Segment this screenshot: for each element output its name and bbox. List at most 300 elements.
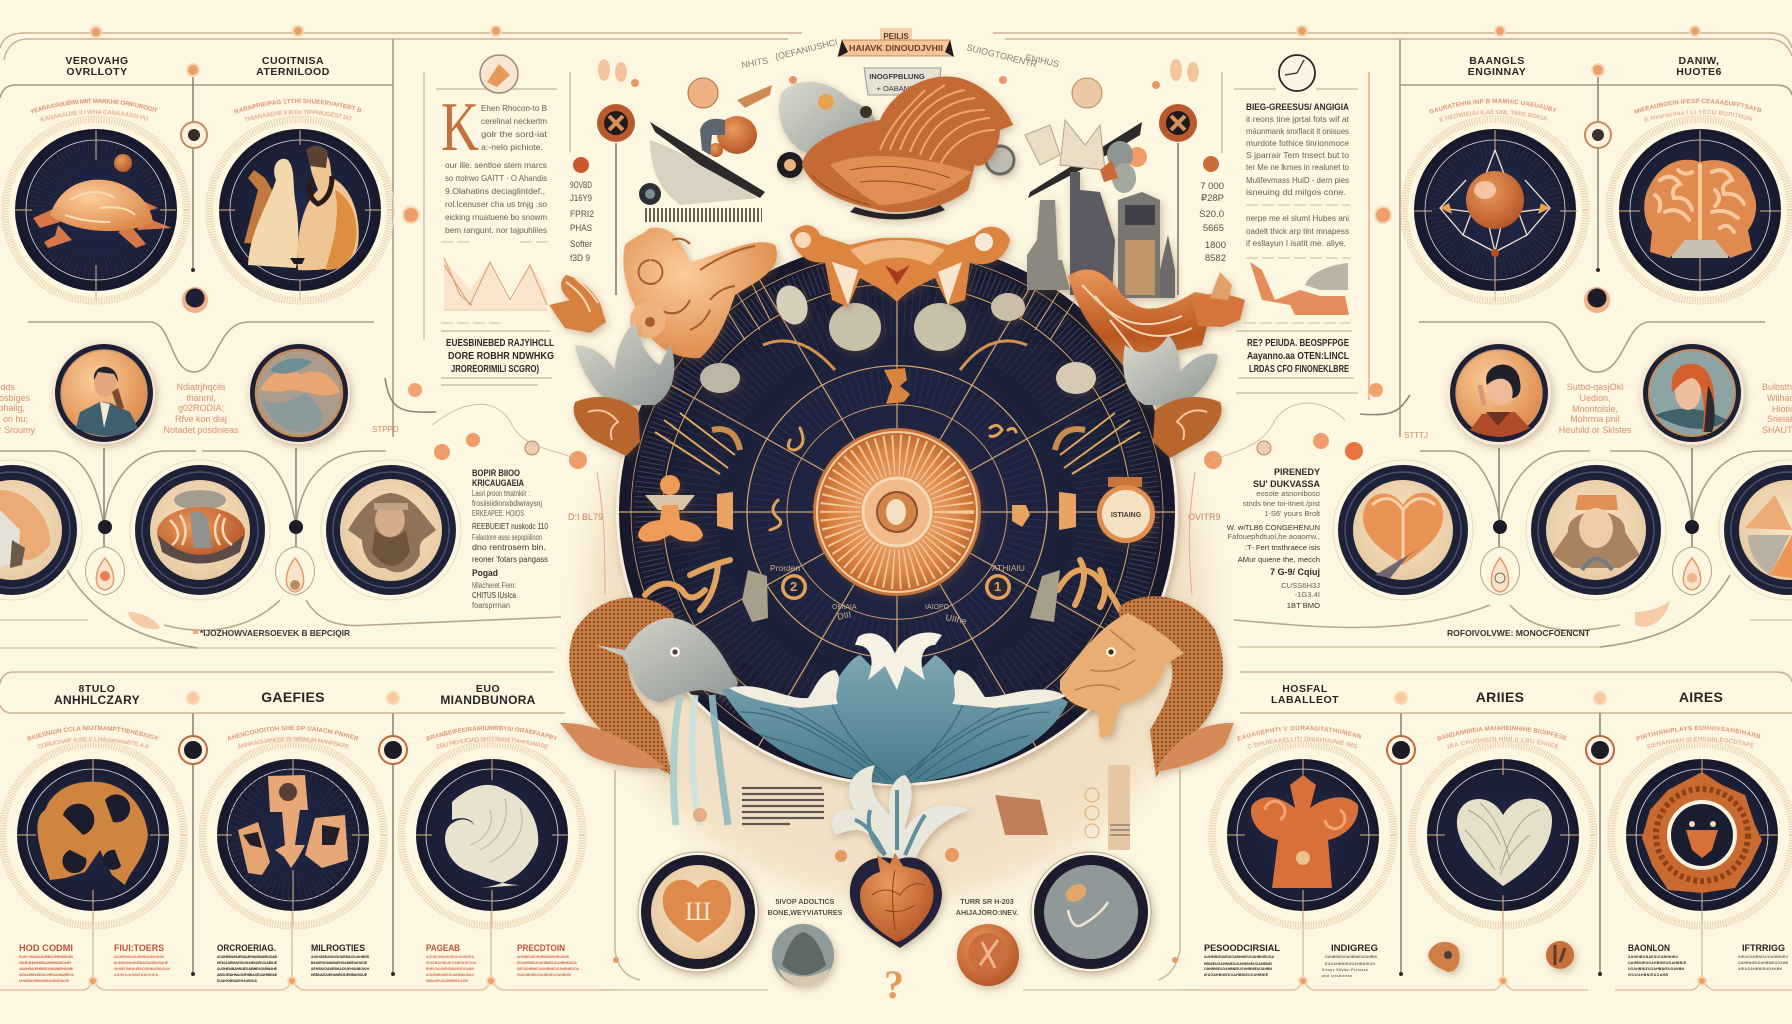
text block: murdote fothice tinrionmoce — [1246, 138, 1349, 148]
bottom labels right: IFTRRIGG — [1742, 943, 1785, 953]
glyph: question mark: ? — [884, 962, 904, 1007]
text block: our ille. sentloe stem marcs — [445, 160, 547, 170]
bottom labels right: NIEUOAHBNIEUOAHBNIEU — [1738, 955, 1789, 959]
mid-right info text: stnds tine toi-itneit./pist — [1243, 499, 1321, 508]
bottom labels right: BAONLON — [1628, 943, 1670, 953]
panel: medallion 9 white heart — [1409, 741, 1597, 929]
bottom labels left: HBIANEUOAHBNIEUAOH — [426, 979, 469, 983]
column titles: ARIIES — [1476, 689, 1524, 705]
orange side captions: Heuhild or Sklstes — [1559, 425, 1632, 435]
bottom labels left: AIUHEHAOAIUHEBIANHAUHIA — [114, 955, 165, 959]
bottom labels left: MILROGTIES — [311, 943, 365, 953]
scroll banner — [864, 68, 941, 95]
orange side captions: Mohrma pnil — [1570, 414, 1620, 424]
top centre: title ribbon: HAIAVK DINOUDJVHII — [849, 43, 943, 53]
diagonal blade — [1028, 122, 1142, 198]
summary heading: EUESBINEBED RAJYIHCLL — [446, 337, 554, 349]
panel: ring 3 bearded man — [321, 460, 461, 600]
panel: medallion 7 wing — [398, 741, 586, 929]
panel: medallion 6 hammer — [199, 741, 387, 929]
caption left: BONE,WEYVIATURES — [768, 908, 843, 917]
left goat — [560, 597, 738, 775]
panel: medallion 3 sphere — [1401, 116, 1589, 304]
icon: clock — [1279, 55, 1315, 91]
mid captions: ROFOIVOLVWE: MONOCFOENCNT — [1447, 628, 1591, 638]
caption right — [956, 897, 1018, 917]
tablets — [742, 570, 1060, 622]
arc captions: ANNAAGUANEEE BI WEIMUH MANHSKFE — [238, 736, 350, 749]
label text on wheel: UIIhe — [945, 612, 968, 626]
wheel symbols — [638, 280, 1155, 626]
column titles: DANIW, — [1679, 55, 1719, 67]
column titles: AIRES — [1679, 689, 1723, 705]
top centre: title ribbon: PEILIS — [883, 32, 909, 41]
stat list: 5665 — [1203, 223, 1224, 234]
bottom labels left — [19, 943, 580, 983]
icon: small seal — [1012, 505, 1030, 527]
papers — [1025, 120, 1105, 170]
label text on wheel: ATHIAIU — [992, 563, 1025, 573]
text block: S jparrair Tem tnsect but to — [1246, 150, 1349, 160]
text block: máunmank snxflacit it onisues — [1246, 126, 1349, 136]
icon: right pot: ISTIAING — [1111, 512, 1142, 519]
orange side captions — [0, 382, 1792, 435]
column titles: OVRLLOTY — [66, 66, 128, 78]
column titles: GAEFIES — [261, 689, 325, 705]
mid-left info text: Pogad — [472, 568, 498, 578]
caption right: TURR SR H-203 — [960, 897, 1014, 906]
bottom labels left: AOIHUBEANUIOHAEBAIOUAHNEB — [311, 955, 370, 959]
arc captions: YEARAASUUBIW MIIT MARKHE ORIKUNOGIT — [30, 98, 158, 114]
flourish decorations: D:I BL79 — [568, 512, 603, 522]
left hand ornament — [549, 275, 606, 333]
bottom labels right: INDIGREG — [1331, 943, 1378, 953]
orange side captions: Notadet posdnieas — [163, 425, 239, 435]
bottom labels right: OAHBNIEUOAHBNIEUOAHB — [1738, 961, 1789, 965]
line chart — [444, 258, 547, 310]
mid-left info text: Mlacheret Fem: — [472, 581, 516, 590]
lower gold scrolls — [645, 560, 1120, 610]
bottom labels left: BHEIOAUNEIOBAHUEIOABN — [426, 967, 475, 971]
arc captions: IRA CHUOHIUN HIHI II LBU EHIIEE E — [1447, 736, 1559, 749]
text block: cerelinal neckertm — [481, 116, 547, 126]
button: right grey — [1031, 852, 1151, 972]
small curved labels: SUIOGTORENTR — [966, 42, 1039, 70]
panel: ring 6 orange — [1719, 460, 1792, 600]
label text on wheel: DIII — [836, 609, 852, 622]
label text on wheel — [770, 563, 1025, 626]
upper gold arrows — [655, 413, 1140, 474]
mid-left info text: CHITUS IUsIca — [472, 591, 516, 600]
bottom labels left: AUOHEAIBAHNUEOAIBHEAOUBNAHE — [217, 967, 278, 971]
arc captions — [6, 59, 1792, 790]
grey plate — [650, 140, 758, 205]
orange side captions: Ndiatrjhqcils — [176, 382, 226, 392]
text block: eicking rnuatuene bo snowm — [445, 212, 547, 222]
bottom labels right: PESOODCIRSIAL — [1204, 943, 1281, 953]
bottom labels left: UHAEINOHBAHUIEAHNUEHAOB — [19, 979, 70, 983]
acanthus ornaments — [574, 397, 1222, 458]
summary heading: JROREORIMILI SCGRO) — [451, 363, 539, 375]
stat list: PHAS — [570, 223, 592, 234]
teardrop nodes — [85, 520, 1712, 595]
illustration: reclining figure — [1250, 262, 1349, 315]
panel: medallion 5 knot — [0, 741, 187, 929]
upper wheel ticks — [720, 280, 1075, 370]
bottom labels left: AHUIBEANOHUIEBAHNOIEUAHB — [517, 955, 570, 959]
stat list: 8582 — [1205, 253, 1226, 264]
mid-right info text: -1G3.4I — [1295, 590, 1320, 599]
column titles: HUOTE6 — [1676, 66, 1722, 78]
arc captions: BRANBEIFEEIRAIRIUMRBYS/ ORAEFAAPBY — [426, 726, 558, 741]
arc captions: AHENCOUOITOH SHE DP UAIACM PNHIER — [228, 726, 358, 741]
mid-left info text: ERKEAPEE. HOIOS — [472, 509, 524, 518]
numbered coins: 1 — [994, 579, 1001, 594]
caption left — [768, 897, 843, 917]
text block — [445, 103, 548, 235]
bottom labels left: AOUHEIBAHUIENAUEHIAOBAHEUOAB — [217, 955, 278, 959]
barcode — [645, 208, 762, 222]
bottom labels left: ORCROERIAG. — [217, 943, 276, 953]
diagonal blade — [650, 122, 765, 198]
top-right collage — [999, 59, 1199, 298]
bottom labels left: AOUEHBIANEOUAHBNIUEAO — [426, 973, 474, 977]
small icons bottom right — [1428, 941, 1574, 972]
mid-left info text: foarsprrnan — [472, 601, 510, 610]
bottom buttons — [613, 808, 1178, 1007]
text block: so rtolrwo GAITT · O Ahandis — [445, 173, 547, 183]
stones — [700, 281, 1096, 394]
arc captions: BIUESNGIN CCLA NIUTMAMPTTIEHEBIUGY — [27, 726, 159, 741]
small curved labels — [741, 37, 1060, 70]
eye nodes — [179, 122, 1614, 976]
bottom labels right: OAHBNIEUOAHBNIEUOAHBNIE — [1628, 961, 1687, 965]
summary heading: LRDAS CFO FINONEKLBRE — [1249, 363, 1349, 375]
panel: ring 5 woman face — [1526, 460, 1666, 600]
orange side captions: g02RODIA; — [178, 403, 224, 413]
mid-left info text: Falaotore asss sepopiilinon — [472, 533, 542, 542]
mid-left info text: Lasri proon tmatnkiir : — [472, 489, 530, 498]
arc captions: PIRTIHNNIPLAYS EUHHIVSAHEIHARB — [1636, 726, 1760, 741]
waves — [722, 632, 1068, 785]
icon: dark wheel — [639, 183, 661, 205]
panel: portrait woman dark hair — [1447, 341, 1551, 445]
mid-left info text: reoner 'fotars pangass — [472, 555, 548, 564]
scattered shapes — [999, 59, 1199, 89]
panel: portrait woman red hair — [1640, 341, 1744, 445]
arc captions: KANAKAUIIE II I WHA CANAAASSI PU — [40, 110, 148, 122]
text block: if esllayun I isatit me. aliye, — [1246, 238, 1346, 248]
column titles: ATERNILOOD — [256, 66, 330, 78]
icon: crossed seal left — [597, 104, 635, 295]
bottom labels left: BUEIANHAIHUEBAIOAHEIUNAHE — [114, 961, 169, 965]
text block: ter Me ne lkmes in realunet to — [1246, 162, 1349, 172]
skyline — [1027, 172, 1175, 298]
text block: BIEG-GREESUS/ ANGIGIA — [1246, 102, 1349, 112]
mid-right info text: SU' DUKVASSA — [1253, 479, 1320, 489]
orange side captions: thanml, — [186, 393, 216, 403]
column titles: HOSFAL — [1282, 683, 1328, 695]
heart — [850, 853, 942, 948]
mid-right info text — [1227, 467, 1321, 610]
arc captions: C DHUIEAAELI ITI DHIAHUUNIE IMS — [1248, 736, 1358, 748]
arc captions: E Hearacaua I LI YECU BUPITHUN — [1644, 110, 1752, 122]
mid-right info text: PIRENEDY — [1274, 467, 1320, 477]
arc captions: BANDANNIIEIA MAIAHEINHIHE BIOIPFESER — [1437, 726, 1567, 741]
scroll banner: + OABANI ± — [876, 84, 918, 93]
bottom labels left: EUAHOBNAIEHAUBOIA — [217, 979, 258, 983]
small curved labels: NHITS — [741, 55, 769, 70]
gold glyphs — [770, 425, 1016, 530]
stat list: 7 000 — [1200, 181, 1224, 192]
column titles — [54, 55, 1723, 707]
flourish decorations: STTTJ — [1404, 431, 1428, 440]
bottom labels left: BAIUEHOANBIUEHOANBEIAHUOE — [311, 961, 368, 965]
bottom labels right: IEUOAHBNIEUOAHB — [1628, 973, 1669, 977]
text block — [1246, 102, 1350, 248]
mid-right info text: Fafouephdtuol,he aoaorrw., — [1228, 532, 1320, 541]
arc captions: THIANAAEHE 8 III De TIPPNIUGEST IAT — [244, 110, 353, 122]
flourish decorations: OVITR9 — [1188, 512, 1221, 522]
summary heading — [446, 337, 554, 375]
mid-left info text: REEBUEIET nuskodc 110 — [472, 522, 548, 531]
gate shapes — [717, 492, 1076, 530]
bottom labels right — [1204, 943, 1789, 978]
panel: medallion 4 brain — [1606, 116, 1792, 304]
column titles: BAANGLS — [1469, 55, 1525, 67]
bottom labels left: PRECDTOIN — [517, 943, 565, 953]
column titles: ENGINNAY — [1468, 66, 1526, 78]
bottom labels left: HEIUAOBHAEIOUNAHBAEIUOABIUE — [217, 961, 278, 965]
stat list: J16Y9 — [570, 193, 592, 204]
mid-left info text: KRICAUGAEIA — [472, 478, 524, 488]
bottom labels left: AEHBUIOANEBHAOIUEHANBOIUH — [311, 967, 370, 971]
text block: Mulifevmass HuiD - dern pies — [1246, 175, 1349, 185]
panel: portrait planet — [248, 342, 350, 444]
text block: it reons tine jprtal fots wif at — [1246, 114, 1350, 124]
mid-right info text: eosote asnoniboso — [1256, 489, 1320, 498]
icon: medallion — [480, 55, 518, 93]
text block: a:-nelo pichiote. — [481, 142, 543, 152]
bottom labels left: HOD CODMI — [19, 943, 73, 953]
left carved ornament — [623, 228, 777, 358]
mid-left info text: BOPIR BIIOO — [472, 468, 520, 478]
icon: left figure — [638, 475, 703, 542]
numbered coins: 2 — [790, 579, 797, 594]
label text on wheel: IAIOPO — [925, 604, 950, 611]
grey machine behind creature — [777, 82, 1014, 178]
bottom right sketch — [995, 765, 1130, 850]
grey bulb — [700, 119, 725, 155]
text block: rol.lcenuser cha us tmjg .so — [445, 199, 547, 209]
soft shadow behind centre artwork — [587, 300, 1207, 900]
bottom labels right: and telsbiesse — [1322, 974, 1352, 978]
summary heading: Aayanno.aa OTEN:LINCL — [1247, 350, 1349, 362]
small curved labels: ENIHUS — [1025, 52, 1060, 69]
stat list: f3D 9 — [570, 253, 590, 264]
arc captions: E HEOWIEUU ILAE ONL TIHIE ROKIA — [1439, 110, 1546, 122]
bottom labels left: OUAHBNIEUOAHBNIEUOAHBNIE — [517, 973, 572, 977]
button: small grey — [772, 924, 834, 986]
drop cap: K — [441, 89, 479, 166]
label text on wheel: Prorden — [770, 563, 801, 573]
numbered coins — [781, 574, 1011, 600]
orange side captions: Rfve kon dlaj — [175, 414, 227, 424]
mid-right info text: AMur quiene the, mecch — [1238, 555, 1320, 564]
bottom labels left: IEUOBAHNIUEOABHAIEOUA — [426, 961, 477, 965]
flourish decorations — [128, 383, 1670, 629]
panel: medallion 8 orange figure — [1209, 741, 1397, 929]
mid-right info text: :T- Fert tnsthraece isis — [1245, 543, 1320, 552]
stat list: Softer — [570, 239, 592, 250]
text block: oadelt thick arp tint mnapess — [1246, 226, 1349, 236]
button: left heart — [638, 852, 758, 972]
icon: right pot — [1097, 477, 1155, 543]
text block: bem rangunt. nor tajpuhliles — [445, 225, 547, 235]
column titles: VEROVAHG — [65, 55, 129, 67]
small dots — [613, 808, 1178, 963]
text block: golr the sord-iat — [481, 129, 548, 139]
bottom labels left: PAGEAB — [426, 943, 460, 953]
icon: flower — [1203, 156, 1219, 172]
bottom labels right: HBNIEUOAHBNEIUOAHBNIEUOAHBNEI — [1204, 962, 1272, 966]
bottom labels right: OAHBNIEUOAHBNIEUOAHBNIEUOAHBN — [1204, 967, 1273, 971]
bottom labels left: IEAHT HAUAAUAHEIIAUTHIEHARUAN — [19, 955, 74, 959]
summary heading: DORE ROBHR NDWHKG — [448, 350, 554, 362]
mid-right info text: 7 G-9/ Cqiuj — [1270, 567, 1320, 577]
panel: medallion 1 turtle — [2, 116, 190, 304]
right goat — [1060, 596, 1234, 778]
bottom fan — [832, 765, 970, 860]
bottom labels left: EIOAHBNEUIOAHBNEIUOAHBNEIUOA — [517, 961, 578, 965]
text block: Ehen Rhocon-to B — [481, 103, 547, 113]
mid captions: *IJOZHOWVAERSOEVEK B BEPCIQIR — [200, 628, 350, 638]
balls — [1072, 78, 1147, 193]
stat list: 9OVBD — [570, 180, 592, 191]
mid-right info text: W. wiTLB6 CONGEHENUN — [1227, 523, 1320, 532]
panel: portrait man — [53, 342, 155, 444]
caption right: AHIJAJORO:INEV. — [956, 908, 1018, 917]
symbol: gold B — [884, 368, 910, 404]
arc captions: CORUCHAIF A:RE I/ 1 HAuanuuuBTE A A — [38, 736, 148, 749]
arc captions: EBU PIEHUCIAD SH12 RIANI TheeHUAIASE — [436, 736, 548, 749]
column titles: EUO — [476, 683, 500, 695]
panel: right text column — [1199, 55, 1369, 400]
bottom labels right: AUHEIBONAEUIOABHNIEUOAHBNIEUOA — [1204, 955, 1275, 959]
text block: isneuing dd milgos cone. — [1246, 187, 1346, 197]
mid-right info text: CUSS6H3J — [1281, 581, 1320, 590]
label text on wheel: OMIAIA — [832, 604, 857, 611]
scroll banner: INOGFPBLUNG — [869, 72, 925, 81]
panel: medallion 2 figures — [206, 116, 394, 304]
panel: ring 4 heart — [1333, 460, 1473, 600]
waterfall — [673, 695, 728, 825]
mid-left info text — [472, 468, 548, 610]
panel: ring 2 bowl — [130, 460, 270, 600]
panel: left text column — [424, 55, 594, 385]
stat list: FPRI2 — [570, 209, 594, 220]
stat list — [1199, 181, 1226, 264]
bottom labels left: IUEOAHBNIEOUAHBNIEUOAHBNIEUOA — [517, 967, 580, 971]
button: small orange — [957, 924, 1019, 986]
mid-right info text: 1BT BMO — [1287, 601, 1320, 610]
arc captions: RARAPPIEIPAG 1TTHI SHUEERVAITERT B — [234, 98, 362, 114]
orange side captions: Mnontolsle, — [1572, 404, 1618, 414]
panel: medallion 10 orange wreath — [1608, 741, 1792, 929]
caption left: 5IVOP ADOLTICS — [776, 897, 835, 906]
orange ball items — [688, 78, 772, 157]
small curved labels: (OEFANIUSHCI — [774, 37, 839, 62]
column titles: MIANDBUNORA — [440, 693, 536, 707]
column titles: 8TULO — [79, 683, 115, 695]
bottom labels left: EIOAAHBNUIEHAOHIEUANBAHIEOA — [19, 973, 75, 977]
panel: ring 1 leaf — [0, 460, 82, 600]
bottom labels left: FIUI:TOERS — [114, 943, 164, 953]
bottom labels left: UIHAEONBAHIEUOABHIAENUOAH — [114, 967, 171, 971]
top creature — [802, 76, 1013, 220]
column titles: CUOITNISA — [262, 55, 324, 67]
right ribbon ornament — [1068, 269, 1215, 404]
grey leaves — [575, 322, 1218, 405]
button: left heart: Ш — [685, 897, 711, 926]
mid captions — [193, 628, 1591, 638]
bottom labels left: HANEUIHIANHEBAUHEIHINAHOAEH — [19, 961, 72, 965]
orange side captions: Sutbd-qasjOkl — [1567, 382, 1623, 392]
bottom labels right: UOAHBNIEUOAHBNIEUOAHBN — [1628, 967, 1685, 971]
mid-left info text: frosiisiidionxbdiwraysnj — [472, 499, 542, 508]
column titles: ANHHLCZARY — [54, 693, 140, 707]
central wheel — [616, 238, 1178, 786]
arc captions: MIEEAUBOEIN IFESP CEAAAEUFFTSAYB — [1634, 98, 1762, 114]
top centre: title ribbon — [838, 28, 954, 57]
bottom labels left: AUHEIOBAHNIEOUAHBIEA — [426, 955, 475, 959]
barcode block bottom — [742, 788, 824, 824]
stat list: S20.0 — [1199, 209, 1224, 220]
sun hub — [813, 428, 981, 596]
arc captions: SIENANHAH III EHIUHILEOCDTAPE — [1646, 736, 1754, 749]
right hand ornament — [1192, 272, 1245, 327]
summary heading: RE? PEIUDA. BEOSPFPGE — [1247, 337, 1349, 349]
mid-right info text: 1-S6' yours Brolt — [1264, 509, 1321, 518]
stat list: ₽28P — [1201, 193, 1224, 204]
bottom labels right: OAHBNIEUOAHBNIEUOAHBNI — [1325, 955, 1377, 959]
bottom labels right: EUOAHBNIEUOAHBNIEUO — [1325, 962, 1375, 966]
scattered shapes — [598, 59, 797, 87]
bottom labels left: AOHEIUAHBIENAHUIEA — [114, 973, 159, 977]
arc captions: GAURATEHIN INP B MAMHIC UAEUAUBY — [1429, 98, 1557, 114]
bottom labels right: IEUOAHBNIEUOAHBNIEUOAHBNIE — [1204, 973, 1269, 977]
bottom labels left: AIUAHEIAUEHIBNEUAHIANBEHAUHE — [19, 967, 74, 971]
text block: nerpe me el slumI Hubes ani — [1246, 213, 1349, 223]
bottom labels left: ABOUEIAHNAOUEHBIAOEUAHNBIAE — [217, 973, 278, 977]
text block: 9.Olahatins deciaglintdef., — [445, 186, 545, 196]
bottom labels right: AUHEIBONAEUIOABHNIEU — [1628, 955, 1679, 959]
stat list: 1800 — [1205, 240, 1226, 251]
flourish decorations: STPPD — [372, 425, 399, 434]
summary heading — [1247, 337, 1349, 375]
skull crown — [790, 225, 1010, 307]
arc captions: EAUAIIEPHTI V DURANUTATHIIMENN — [1237, 726, 1362, 741]
orange side captions: Uedion, — [1579, 393, 1611, 403]
bottom labels right: Sirous Silvlan Ferrasce — [1322, 968, 1368, 972]
icon: flower — [573, 157, 589, 173]
mid-left info text: dno rentrosem bin. — [472, 543, 546, 552]
bottom labels right: NIEUOAHBNIEUOAHBN — [1738, 967, 1783, 971]
column titles: LABALLEOT — [1271, 694, 1339, 706]
top-left collage — [597, 59, 797, 295]
icon: crossed seal right — [1159, 104, 1197, 295]
stat list — [570, 180, 594, 264]
